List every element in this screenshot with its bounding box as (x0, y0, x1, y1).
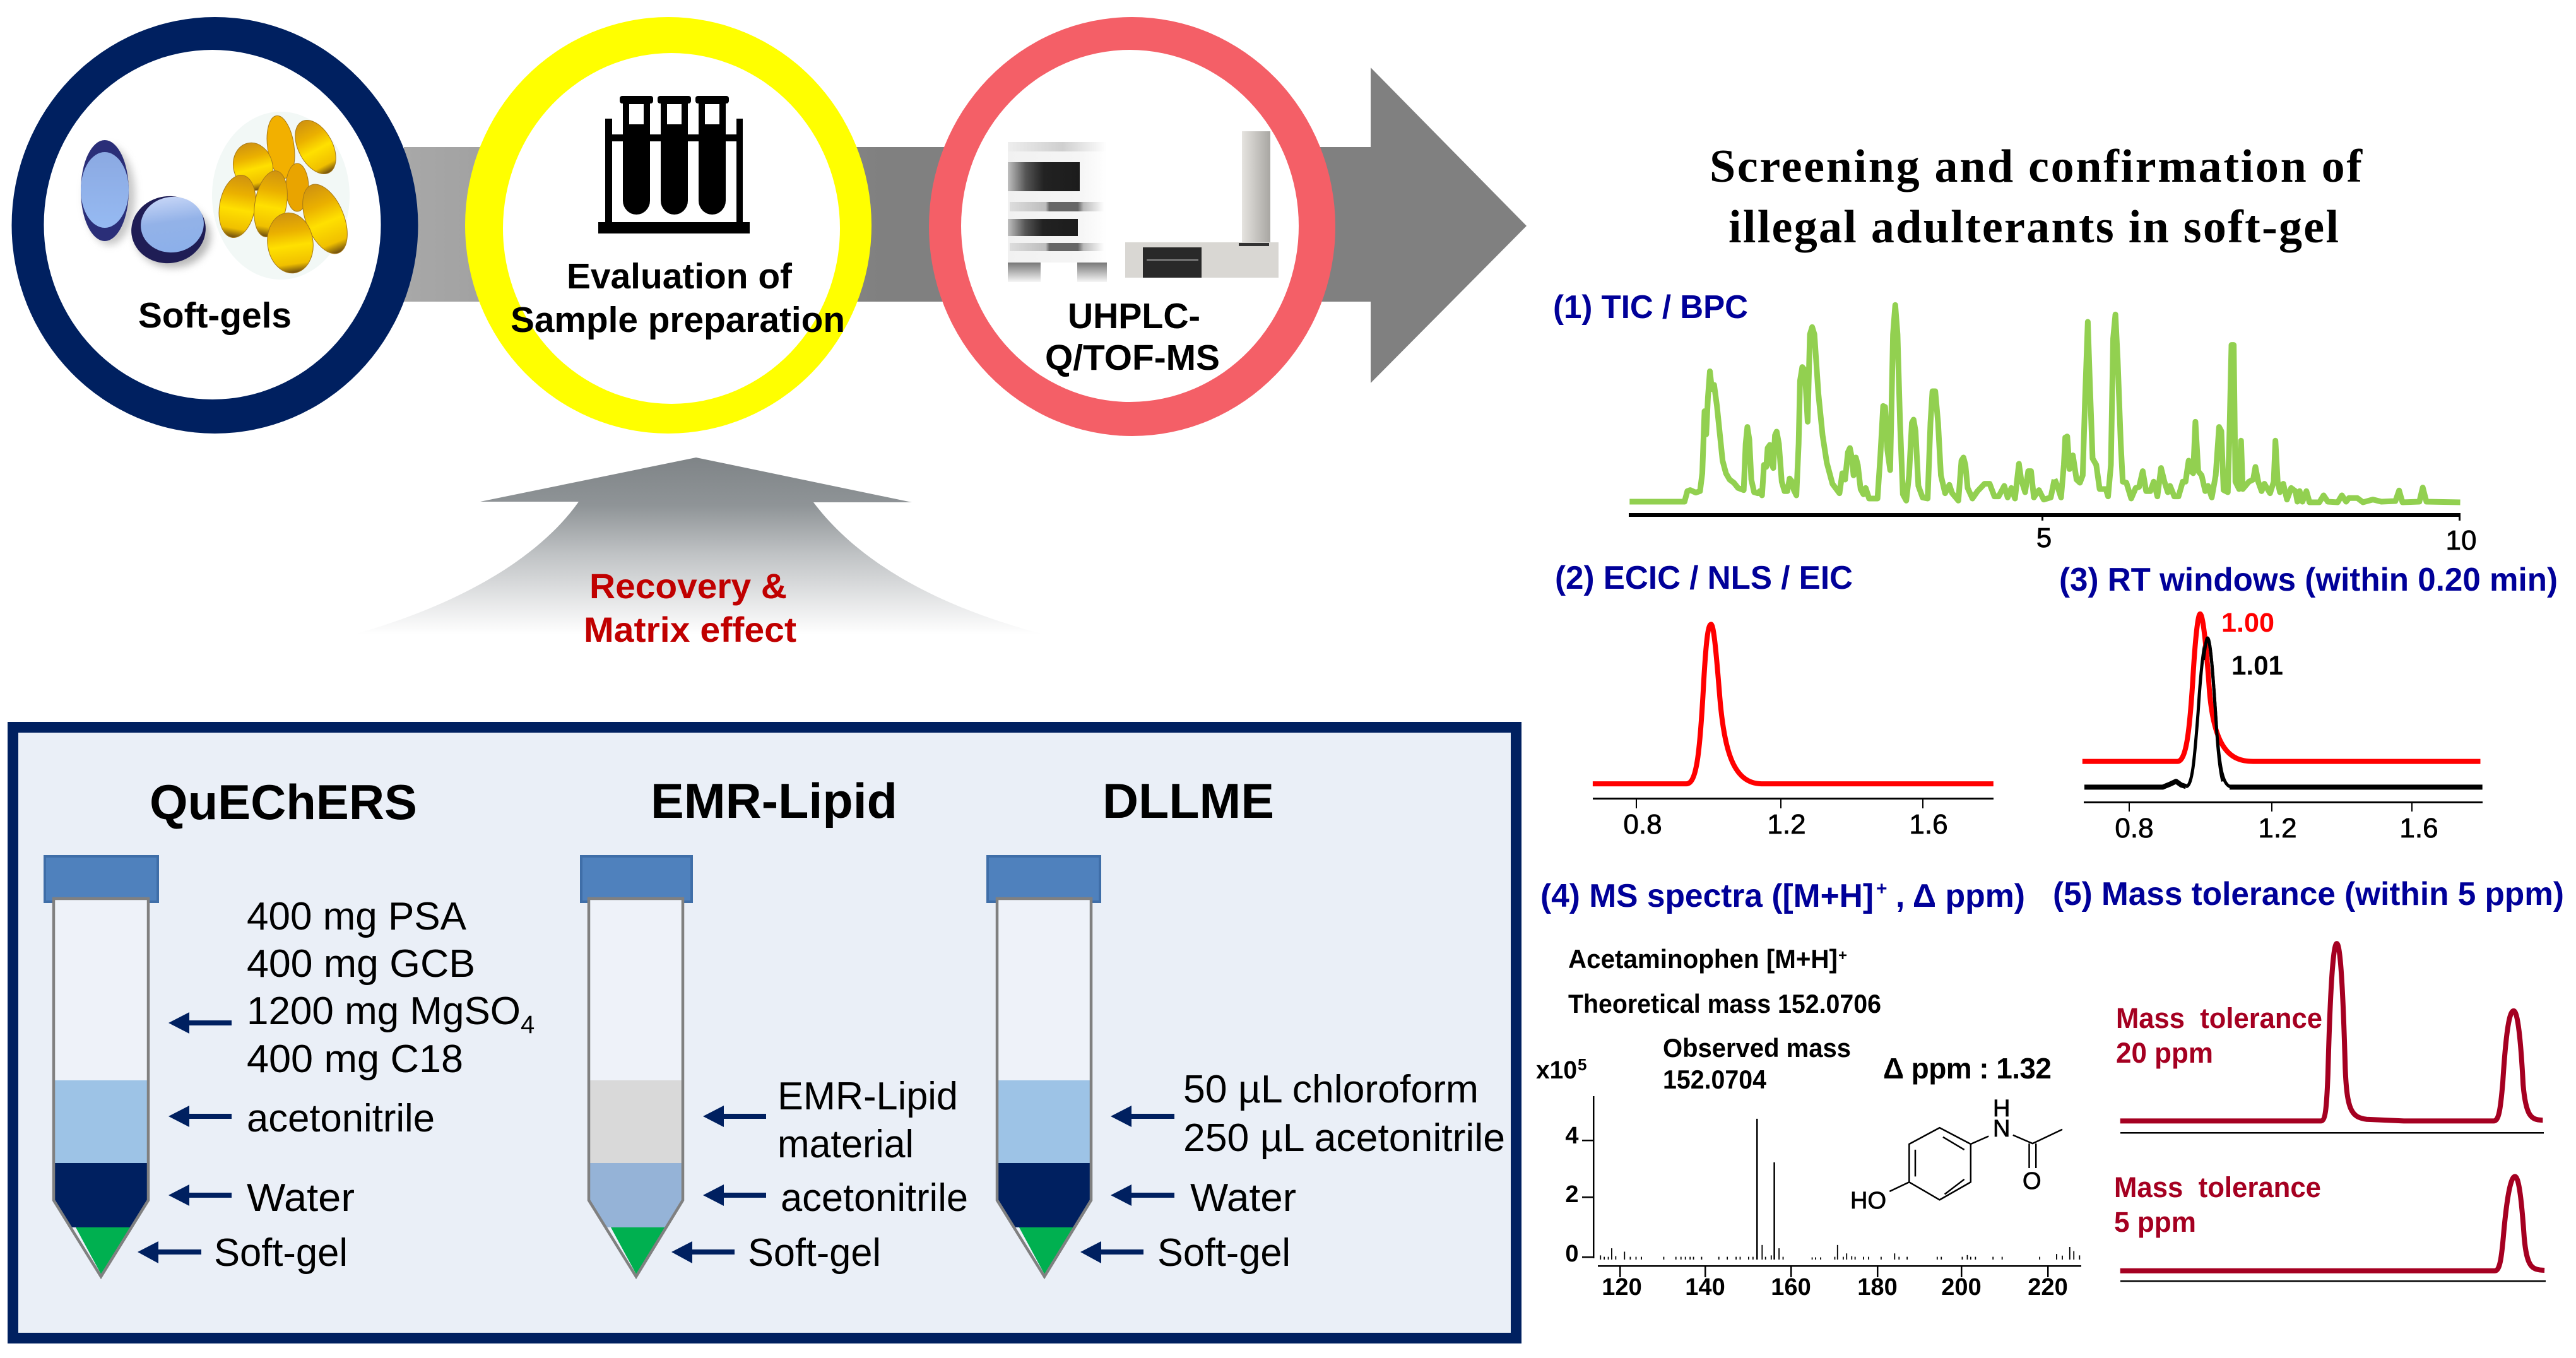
axis: retention time: 10 (2446, 525, 2476, 556)
label: evaluation of sample preparation: Evaluation of (567, 256, 793, 297)
labels: EMR-Lipid reagents: Soft-gel (748, 1231, 881, 1275)
axes: mass spectrum (1565, 1096, 2081, 1301)
text: observed mass: 152.0704 (1663, 1065, 1767, 1094)
labels: QuEChERS reagents: 400 mg GCB (247, 942, 475, 986)
labels: DLLME reagents (1157, 1068, 1505, 1275)
axis: retention time: 5 (2036, 523, 2052, 553)
label: evaluation of sample preparation (511, 256, 845, 340)
label: mass tolerance 20 ppm: 20 ppm (2116, 1037, 2213, 1069)
label: mass tolerance 5 ppm: 5 ppm (2114, 1206, 2196, 1238)
chromatogram: RT overlay (2083, 614, 2483, 787)
axes: mass spectrum: 180 (1857, 1274, 1898, 1301)
labels: QuEChERS reagents: 1200 mg MgSO (247, 989, 521, 1033)
icon: test tube rack (598, 96, 750, 233)
heading: TIC / BPC: (1) TIC / BPC (1553, 289, 1748, 326)
label: UHPLC-Q/TOF-MS: UHPLC- (1068, 296, 1200, 336)
label: UHPLC-Q/TOF-MS: Q/TOF-MS (1045, 338, 1220, 378)
panel 5: mass tolerance (2053, 876, 2564, 1282)
heading: MS spectra: (4) MS spectra ([M+H] (1540, 878, 1874, 914)
panel: sample preparation methods (13, 727, 1516, 1338)
label: evaluation of sample preparation: Sample preparation (511, 300, 845, 340)
chart: mass spectrum peaks (1600, 1119, 2079, 1260)
axes: mass spectrum: 4 (1565, 1123, 1579, 1149)
axis: 20 ppm (2120, 1132, 2544, 1133)
text: y axis multiplier: x10 (1536, 1056, 1577, 1084)
molecule: acetaminophen (1850, 1095, 2062, 1214)
axes: mass spectrum: 160 (1771, 1274, 1811, 1301)
title (1710, 141, 2363, 253)
label: UHPLC-Q/TOF-MS (1045, 296, 1220, 378)
main process arrow (404, 68, 1527, 383)
axis: RT (2084, 801, 2483, 844)
labels: QuEChERS reagents: Soft-gel (214, 1231, 348, 1275)
chromatogram: 20 ppm (2120, 943, 2543, 1121)
panel 4: MS spectra (1536, 878, 2081, 1301)
heading: EMR-Lipid: EMR-Lipid (651, 773, 897, 829)
text: observed mass (1663, 1033, 1851, 1094)
heading: MS spectra: + (1876, 878, 1888, 899)
label: mass tolerance 20 ppm: Mass tolerance (2116, 1002, 2322, 1034)
axis: 5 ppm (2120, 1280, 2546, 1282)
axes: mass spectrum: 140 (1685, 1274, 1725, 1301)
molecule: acetaminophen: HO (1850, 1188, 1886, 1214)
circle: evaluation of sample preparation (465, 17, 871, 434)
icon: LC stack (1008, 142, 1107, 282)
axis: RT: 1.2 (2258, 813, 2297, 844)
labels: QuEChERS reagents: 400 mg PSA (247, 895, 467, 938)
molecule: acetaminophen: O (2023, 1168, 2041, 1195)
labels: QuEChERS reagents (214, 895, 535, 1275)
heading: MS spectra (1540, 878, 2025, 914)
molecule: acetaminophen: H (1993, 1095, 2010, 1122)
arrows: DLLME (1080, 1106, 1174, 1263)
label: RT 1.01: 1.01 (2231, 651, 2283, 681)
upward arrow: recovery and matrix effect (326, 458, 1075, 649)
tube: EMR-Lipid (581, 856, 692, 1277)
axis: RT: 0.8 (2115, 813, 2154, 844)
tube: QuEChERS (45, 856, 158, 1277)
axis: ECIC: 0.8 (1623, 809, 1662, 840)
heading: MS spectra: , Δ ppm) (1896, 878, 2025, 914)
chromatogram: TIC (1629, 305, 2461, 502)
axes: mass spectrum: 200 (1941, 1274, 1982, 1301)
text: y axis multiplier: 5 (1578, 1055, 1586, 1074)
text: compound name and theoretical mass: Acetaminophen [M+H] (1568, 944, 1838, 974)
icon: blue soft-gel capsules (81, 140, 211, 268)
label: recovery and matrix effect (584, 566, 796, 649)
labels: DLLME reagents: 250 µL acetonitrile (1183, 1116, 1505, 1160)
label: recovery and matrix effect: Matrix effect (584, 610, 796, 649)
axis: ECIC (1593, 798, 1994, 840)
panel 1: TIC / BPC (1553, 289, 2476, 556)
heading: QuEChERS: QuEChERS (150, 774, 417, 830)
text: observed mass: Observed mass (1663, 1033, 1851, 1063)
axes: mass spectrum: 120 (1602, 1274, 1642, 1301)
labels: QuEChERS reagents: 4 (521, 1011, 535, 1039)
axis: ECIC: 1.2 (1767, 809, 1806, 840)
label: mass tolerance 5 ppm: Mass tolerance (2114, 1171, 2321, 1203)
labels: DLLME reagents: 50 µL chloroform (1183, 1068, 1479, 1111)
text: compound name and theoretical mass: + (1838, 947, 1847, 964)
heading: DLLME: DLLME (1102, 773, 1274, 829)
heading: RT windows: (3) RT windows (within 0.20 min) (2059, 562, 2558, 598)
axis: ECIC: 1.6 (1909, 809, 1948, 840)
labels: EMR-Lipid reagents: acetonitrile (781, 1176, 968, 1220)
axis: RT: 1.6 (2399, 813, 2438, 844)
labels: QuEChERS reagents: 400 mg C18 (247, 1037, 463, 1081)
axes: mass spectrum: 0 (1565, 1241, 1579, 1267)
title: Screening and confirmation of (1710, 141, 2363, 192)
labels: DLLME reagents: Soft-gel (1157, 1231, 1291, 1275)
circle: soft-gels (11, 17, 418, 434)
label: recovery and matrix effect: Recovery & (589, 566, 787, 606)
chromatogram: ECIC (1593, 624, 1994, 784)
label: mass tolerance 20 ppm (2116, 1002, 2322, 1069)
axes: mass spectrum: 2 (1565, 1181, 1579, 1208)
axis: retention time (1629, 513, 2476, 556)
circle: UHPLC-Q/TOF-MS (929, 17, 1335, 436)
heading: ECIC / NLS / EIC: (2) ECIC / NLS / EIC (1555, 560, 1853, 596)
labels: EMR-Lipid reagents: material (777, 1123, 914, 1166)
heading: mass tolerance: (5) Mass tolerance (within 5 ppm) (2053, 876, 2564, 912)
panel 2: ECIC / NLS / EIC (1555, 560, 1994, 840)
text: delta ppm: Δ ppm : 1.32 (1883, 1052, 2052, 1085)
arrows: EMR-Lipid (671, 1106, 766, 1263)
text: compound name and theoretical mass (1568, 944, 1881, 1018)
chromatogram: 5 ppm (2120, 1176, 2544, 1271)
axes: mass spectrum: 220 (2028, 1274, 2068, 1301)
labels: QuEChERS reagents: Water (247, 1176, 355, 1220)
label: RT 1.00: 1.00 (2221, 608, 2274, 638)
labels: QuEChERS reagents: acetonitrile (247, 1097, 435, 1140)
arrows: QuEChERS (138, 1012, 232, 1263)
title: illegal adulterants in soft-gel (1728, 201, 2339, 253)
text: compound name and theoretical mass: Theoretical mass 152.0706 (1568, 989, 1881, 1018)
label: soft-gels: Soft-gels (138, 295, 292, 336)
labels: DLLME reagents: Water (1190, 1176, 1296, 1220)
icon: golden soft-gel capsules (212, 112, 357, 280)
labels: EMR-Lipid reagents (748, 1075, 968, 1275)
label: mass tolerance 5 ppm (2114, 1171, 2321, 1238)
icon: mass spectrometer (1125, 131, 1279, 278)
panel 3: RT windows (2059, 562, 2558, 844)
molecule: acetaminophen: N (1993, 1116, 2010, 1142)
tube: DLLME (988, 856, 1100, 1277)
labels: EMR-Lipid reagents: EMR-Lipid (777, 1075, 958, 1118)
